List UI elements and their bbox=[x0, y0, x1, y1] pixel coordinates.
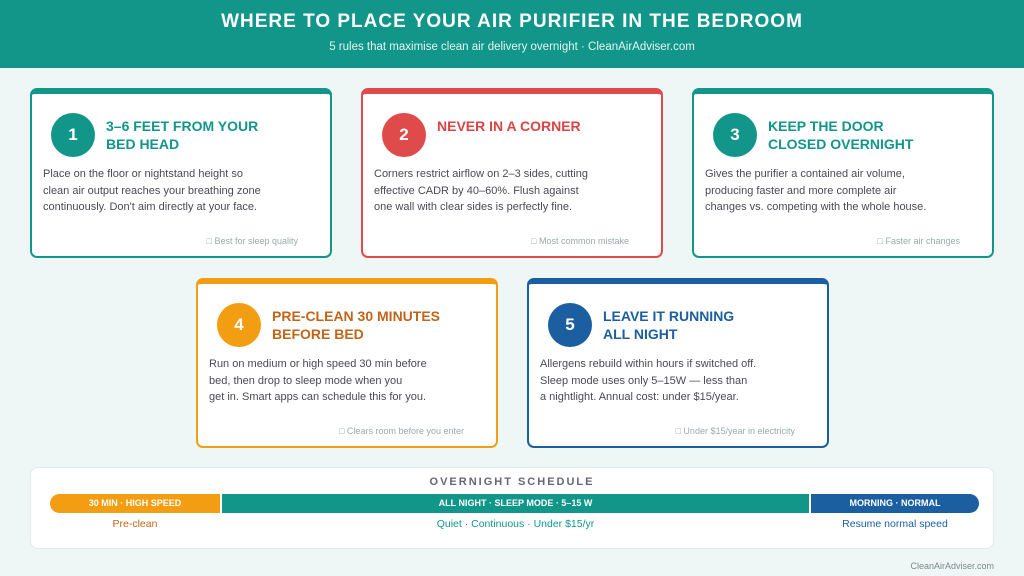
text 3: changes vs. competing with the whole house. bbox=[705, 201, 926, 213]
icon: number 5: 5 bbox=[565, 315, 575, 334]
icon: number 3: 3 bbox=[730, 125, 740, 144]
panel: overnight schedule bbox=[30, 467, 994, 549]
heading 5: LEAVE IT RUNNING bbox=[603, 308, 734, 324]
text 2: effective CADR by 40–60%. Flush against bbox=[374, 184, 579, 196]
subtitle: 5 rules that maximise clean air delivery overnight · CleanAirAdviser.com bbox=[329, 41, 695, 53]
text 5: a nightlight. Annual cost: under $15/year. bbox=[540, 391, 739, 403]
segment: high speed: 30 MIN · HIGH SPEED bbox=[89, 498, 181, 508]
heading 5 bbox=[603, 308, 734, 342]
text 3: producing faster and more complete air bbox=[705, 184, 896, 196]
heading 4: BEFORE BED bbox=[272, 326, 364, 342]
text 1: clean air output reaches your breathing zone bbox=[43, 184, 261, 196]
panel: rule 1 bbox=[30, 88, 332, 258]
text 1: Place on the floor or nightstand height so bbox=[43, 168, 243, 180]
heading 2: NEVER IN A CORNER bbox=[437, 118, 581, 134]
text 2 bbox=[374, 168, 588, 213]
icon: number 2 bbox=[382, 113, 426, 157]
text 4 bbox=[209, 358, 427, 403]
panel: rule 2 bbox=[361, 88, 663, 258]
text 3: Gives the purifier a contained air volume, bbox=[705, 168, 905, 180]
text 1: continuously. Don't aim directly at your face. bbox=[43, 201, 257, 213]
heading 3: CLOSED OVERNIGHT bbox=[768, 136, 913, 152]
segment: high speed bbox=[50, 494, 220, 513]
icon: number 5 bbox=[548, 303, 592, 347]
text 4: Run on medium or high speed 30 min before bbox=[209, 358, 427, 370]
schedule heading: OVERNIGHT SCHEDULE bbox=[430, 476, 594, 488]
heading 4: PRE-CLEAN 30 MINUTES bbox=[272, 308, 440, 324]
tag 5: □ Under $15/year in electricity bbox=[676, 426, 795, 436]
icon: number 2: 2 bbox=[399, 125, 409, 144]
text 4: get in. Smart apps can schedule this for you. bbox=[209, 391, 426, 403]
icon: number 1: 1 bbox=[68, 125, 78, 144]
segment: sleep mode bbox=[222, 494, 809, 513]
tag 3: □ Faster air changes bbox=[878, 236, 960, 246]
header bbox=[0, 0, 1024, 68]
title: WHERE TO PLACE YOUR AIR PURIFIER IN THE BEDROOM bbox=[221, 11, 803, 32]
text 2: Corners restrict airflow on 2–3 sides, cutting bbox=[374, 168, 588, 180]
segment: sleep mode: ALL NIGHT · SLEEP MODE · 5–15 W bbox=[439, 498, 592, 508]
tag 2: □ Most common mistake bbox=[531, 236, 629, 246]
text 5: Allergens rebuild within hours if switched off. bbox=[540, 358, 756, 370]
panel: rule 3 bbox=[692, 88, 994, 258]
icon: number 4: 4 bbox=[234, 315, 244, 334]
panel: rule 5 bbox=[527, 278, 829, 448]
tag 1: □ Best for sleep quality bbox=[207, 236, 298, 246]
label: quiet: Quiet · Continuous · Under $15/yr bbox=[437, 518, 594, 530]
heading 1: BED HEAD bbox=[106, 136, 179, 152]
heading 3: KEEP THE DOOR bbox=[768, 118, 884, 134]
text 5: Sleep mode uses only 5–15W — less than bbox=[540, 374, 747, 386]
heading 5: ALL NIGHT bbox=[603, 326, 677, 342]
segment: morning: MORNING · NORMAL bbox=[850, 498, 940, 508]
text 2: one wall with clear sides is perfectly fine. bbox=[374, 201, 572, 213]
segment: morning bbox=[811, 494, 979, 513]
icon: number 4 bbox=[217, 303, 261, 347]
icon: number 1 bbox=[51, 113, 95, 157]
text 1 bbox=[43, 168, 261, 213]
text 3 bbox=[705, 168, 926, 213]
text 5 bbox=[540, 358, 756, 403]
heading 3 bbox=[768, 118, 914, 152]
label: pre-clean: Pre-clean bbox=[113, 518, 157, 530]
heading 4 bbox=[272, 308, 440, 342]
tag 4: □ Clears room before you enter bbox=[339, 426, 464, 436]
heading 1: 3–6 FEET FROM YOUR bbox=[106, 118, 258, 134]
text 4: bed, then drop to sleep mode when you bbox=[209, 374, 402, 386]
panel: rule 4 bbox=[196, 278, 498, 448]
footer credit: CleanAirAdviser.com bbox=[910, 561, 994, 571]
icon: number 3 bbox=[713, 113, 757, 157]
label: resume: Resume normal speed bbox=[842, 518, 948, 530]
heading 1 bbox=[106, 118, 258, 152]
